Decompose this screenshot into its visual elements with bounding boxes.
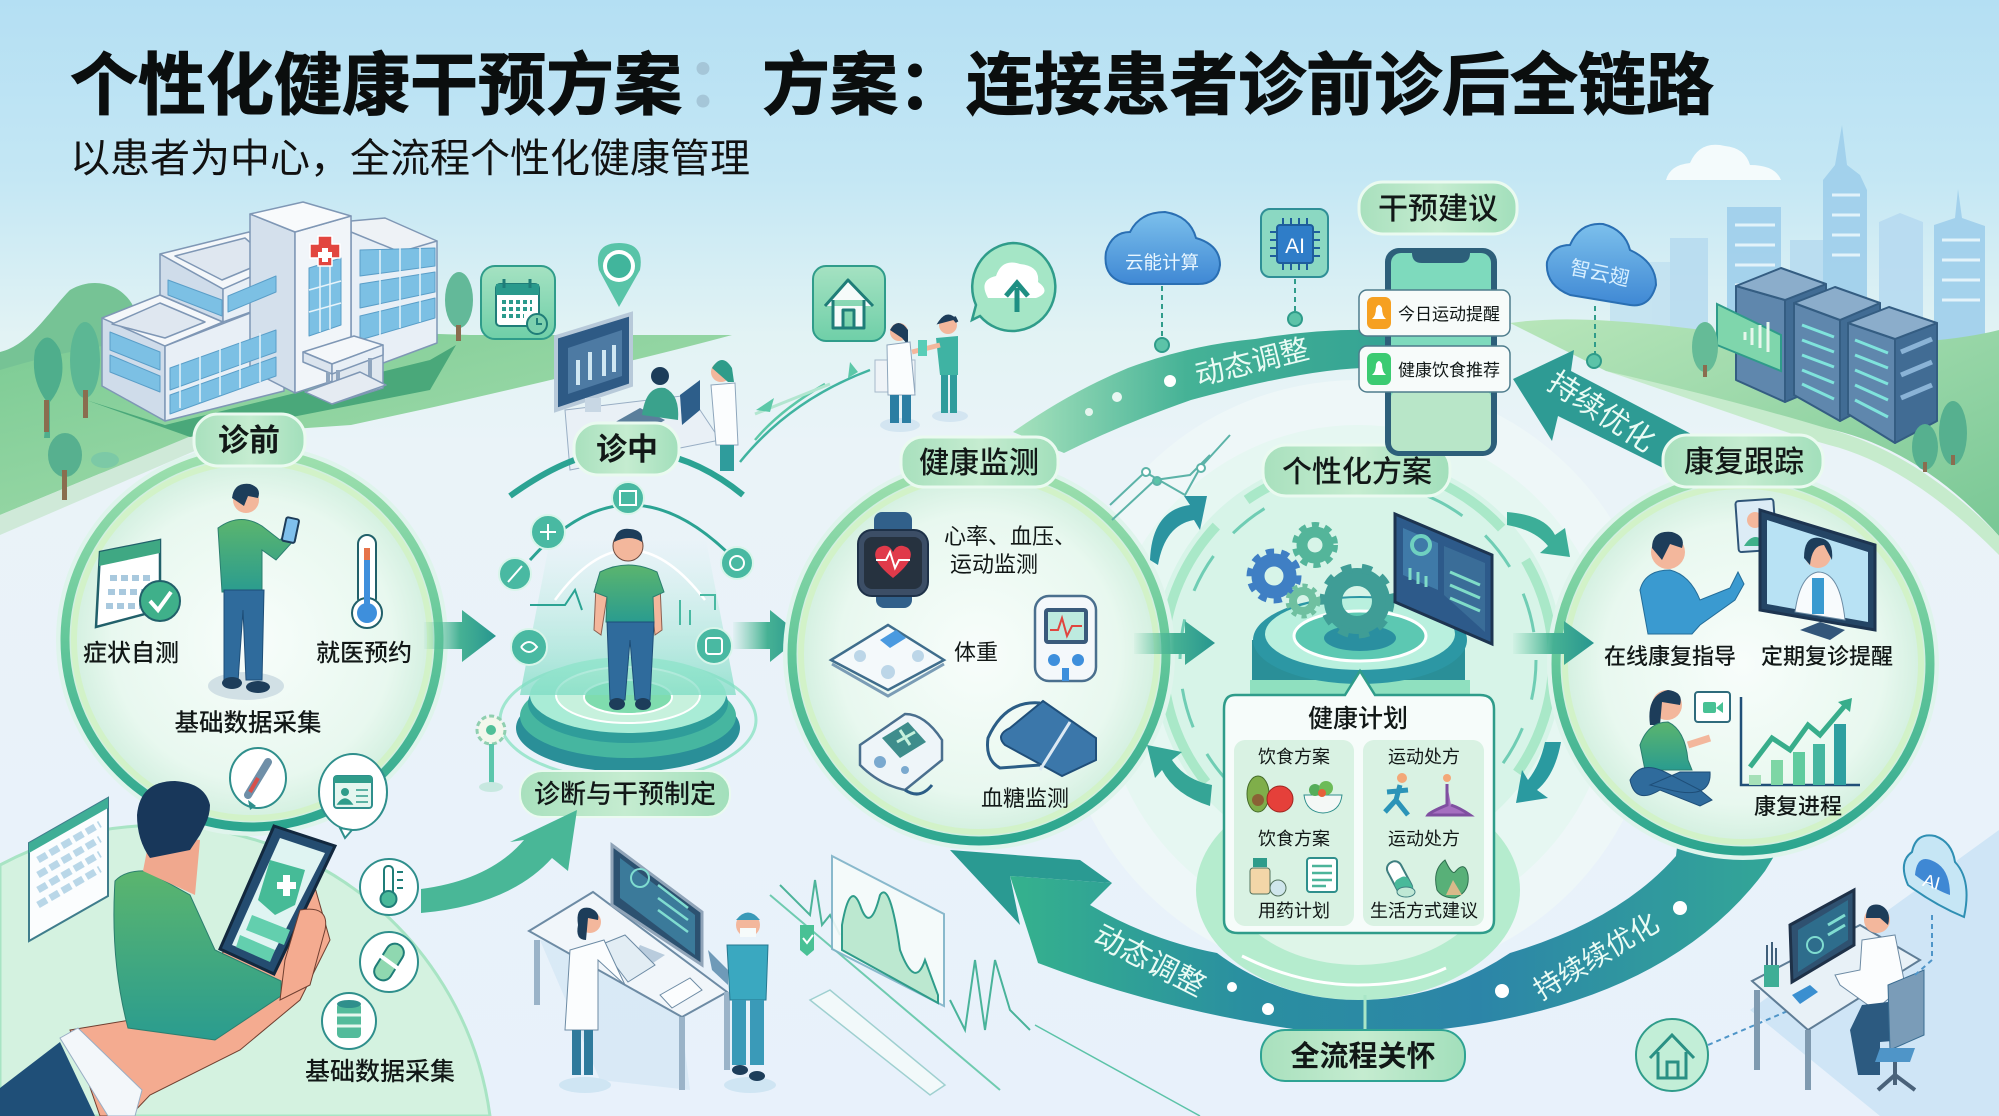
text: 基础数据采集 (lower): 基础数据采集 (305, 1058, 455, 1086)
text: 在线康复指导: 在线康复指导 (1604, 644, 1736, 669)
icon: data dashboard (1395, 514, 1492, 644)
two care staff figures (875, 316, 968, 432)
trees left (34, 272, 473, 500)
icon: home bubble (1636, 1010, 1790, 1091)
icon: calendar (481, 266, 555, 339)
text: 血糖监测: 血糖监测 (981, 786, 1069, 811)
arrow: pre-visit to diagnosis (424, 610, 496, 662)
sub-panel: diet and medication (1234, 740, 1354, 926)
speech bubble icons (230, 748, 418, 1049)
icon: thermometer (352, 535, 382, 628)
figure: doctor in white coat (565, 908, 625, 1075)
title: 个性化健康干预方案 (70, 48, 682, 124)
text: 健康计划: 健康计划 (1308, 705, 1408, 733)
cloud: cloud computing: 云能计算 (1125, 252, 1199, 273)
icon: database bubble (322, 993, 376, 1049)
text: 心率、血压、运动监测 (944, 524, 1076, 577)
text: 症状自测: 症状自测 (83, 640, 179, 667)
small curved arrows around plan (1147, 496, 1570, 806)
label: 康复跟踪 (1663, 435, 1823, 487)
icon: video bubble (1695, 692, 1730, 722)
icon: video call card (1735, 499, 1777, 552)
label: 诊中: 诊中 (596, 432, 658, 467)
label: 诊前: 诊前 (218, 423, 280, 458)
bottom flow band: 持续续优化 (1528, 907, 1664, 1006)
icon: thermometer bubble (230, 748, 286, 810)
large pale centre circle (1058, 380, 1658, 1000)
rising data chart lines (1110, 435, 1230, 520)
cloud: smart cloud: 智云翅 (1568, 256, 1631, 291)
arrow: app to diagnosis (421, 810, 577, 913)
icon: location pin (598, 243, 641, 307)
title: ： (686, 46, 754, 122)
icon: medicine and list (1250, 858, 1337, 896)
label: 诊断与干预制定: 诊断与干预制定 (534, 779, 716, 809)
icon: gears (1250, 525, 1390, 634)
small flow arrows between scenes (740, 362, 870, 462)
label: 干预建议: 干预建议 (1378, 193, 1498, 226)
sub-panel: diet and medication: 用药计划 (1258, 901, 1330, 921)
panel: rehab tracking circle 康复跟踪 (1547, 468, 1939, 860)
skyline (1610, 125, 1985, 360)
icon: AI chip: AI (1285, 235, 1305, 258)
icon: cloud upload bubble (972, 243, 1055, 331)
label: 康复跟踪: 康复跟踪 (1684, 446, 1804, 479)
icon: runner and yoga (1385, 773, 1470, 815)
text: 心率、血压、运动监测: 心率、血压、 (944, 524, 1076, 549)
notification: healthy diet: 健康饮食推荐 (1398, 361, 1500, 380)
icon: tele-consult monitor (1760, 510, 1875, 640)
panel: personalised plan centre platform (1250, 514, 1492, 700)
subtitle: 以患者为中心，全流程个性化健康管理 (70, 137, 750, 181)
sub-panel: exercise and lifestyle: 运动处方 (1388, 829, 1460, 849)
icon: body scale (831, 625, 944, 696)
top flow arrow: 持续优化 (1513, 350, 1695, 468)
panel: pre-visit circle 诊前 (56, 444, 448, 836)
text: 心率、血压、运动监测: 运动监测 (950, 552, 1038, 577)
cloud: sky (1666, 145, 1781, 180)
bottom flow band (950, 820, 1790, 1033)
cloud: AI: AI (1921, 870, 1942, 894)
label: 个性化方案 (1263, 445, 1450, 496)
icon: pills and plant (1384, 859, 1468, 898)
trees right (1692, 322, 1967, 472)
text: 基础数据采集: 基础数据采集 (174, 709, 322, 737)
icon: ID card bubble (319, 754, 387, 838)
right green hill (1510, 319, 1999, 555)
chart: rehab progress (1741, 697, 1860, 785)
icon: smart watch (858, 512, 928, 608)
label: 健康监测 (901, 437, 1058, 487)
data panel by servers (1717, 304, 1781, 371)
notification: exercise reminder: 今日运动提醒 (1398, 305, 1500, 324)
office worker with computer (1752, 890, 1924, 1090)
icon: pill bubble (360, 932, 418, 992)
label: 诊中 (574, 423, 679, 475)
cloud: AI (1904, 835, 1967, 975)
icon: blood pressure monitor (860, 714, 942, 794)
label: 诊断与干预制定 (520, 771, 730, 817)
top flow arrow: 持续优化: 持续优化 (1542, 366, 1660, 459)
hospital building (86, 202, 456, 437)
figure: patient with phone (208, 484, 299, 700)
notification: exercise reminder (1359, 290, 1510, 336)
text: 体重: 体重 (954, 640, 998, 665)
clinic desk scene (529, 845, 776, 1093)
icon: fruit (1247, 776, 1342, 813)
panel: health monitoring circle 健康监测 (783, 458, 1175, 850)
blue floor patch bottom right (1750, 830, 1999, 1116)
icon: home (813, 266, 885, 341)
sub-panel: diet and medication: 饮食方案 (1258, 747, 1330, 767)
bottom left green circle (0, 825, 490, 1116)
figure: patient holding phone (0, 781, 335, 1116)
figure: seated woman (1630, 690, 1712, 806)
arrow: monitoring to plan (1134, 621, 1215, 665)
figure: standing patient (594, 529, 664, 710)
server racks (1736, 268, 1937, 443)
label: 全流程关怀 (1261, 1030, 1465, 1081)
top flow band: 动态调整 (1013, 330, 1510, 453)
icon: glucometer (1035, 596, 1096, 681)
figure: man guiding rehab (1640, 532, 1744, 634)
label: 个性化方案: 个性化方案 (1282, 456, 1432, 489)
icon nodes around the figure (499, 482, 753, 665)
label: 健康监测: 健康监测 (919, 447, 1039, 480)
analytics panel and ECG traces (770, 856, 1200, 1116)
phone: intervention advice (1359, 248, 1510, 456)
title (70, 46, 1714, 124)
cloud: smart cloud (1547, 224, 1656, 368)
schedule card (29, 798, 108, 941)
sub-panel: exercise and lifestyle: 运动处方 (1388, 747, 1460, 767)
text: 就医预约: 就医预约 (316, 640, 412, 667)
arrow: plan to rehab (1513, 621, 1594, 665)
sub-panel: exercise and lifestyle (1363, 740, 1484, 926)
cloud: cloud computing (1106, 212, 1220, 352)
sub-panel: exercise and lifestyle: 生活方式建议 (1370, 901, 1478, 921)
text: 定期复诊提醒: 定期复诊提醒 (1761, 644, 1893, 669)
text: 康复进程: 康复进程 (1754, 794, 1842, 819)
top flow band: 动态调整: 动态调整 (1192, 332, 1312, 393)
arrow: diagnosis to monitoring (733, 610, 802, 662)
icon: temperature bubble (360, 859, 418, 915)
panel: health plan card (1224, 671, 1494, 933)
left green hill (0, 283, 732, 535)
icon: small sensor post (477, 716, 505, 792)
title: 方案：连接患者诊前诊后全链路 (762, 48, 1714, 124)
bottom flow band: 动态调整 (1088, 919, 1210, 1003)
figure: nurse with tablet (708, 912, 768, 1081)
notification: healthy diet (1359, 346, 1510, 392)
icon: pressure cuff (988, 701, 1096, 776)
diagnosis desk scene (556, 314, 738, 471)
label: 全流程关怀: 全流程关怀 (1290, 1040, 1436, 1073)
label: 干预建议 (1359, 182, 1517, 234)
sub-panel: diet and medication: 饮食方案 (1258, 829, 1330, 849)
icon: symptom calendar (96, 540, 180, 627)
icon: AI chip (1261, 209, 1328, 326)
label: 诊前 (194, 414, 305, 466)
panel: diagnosis platform 诊中 (477, 453, 756, 792)
